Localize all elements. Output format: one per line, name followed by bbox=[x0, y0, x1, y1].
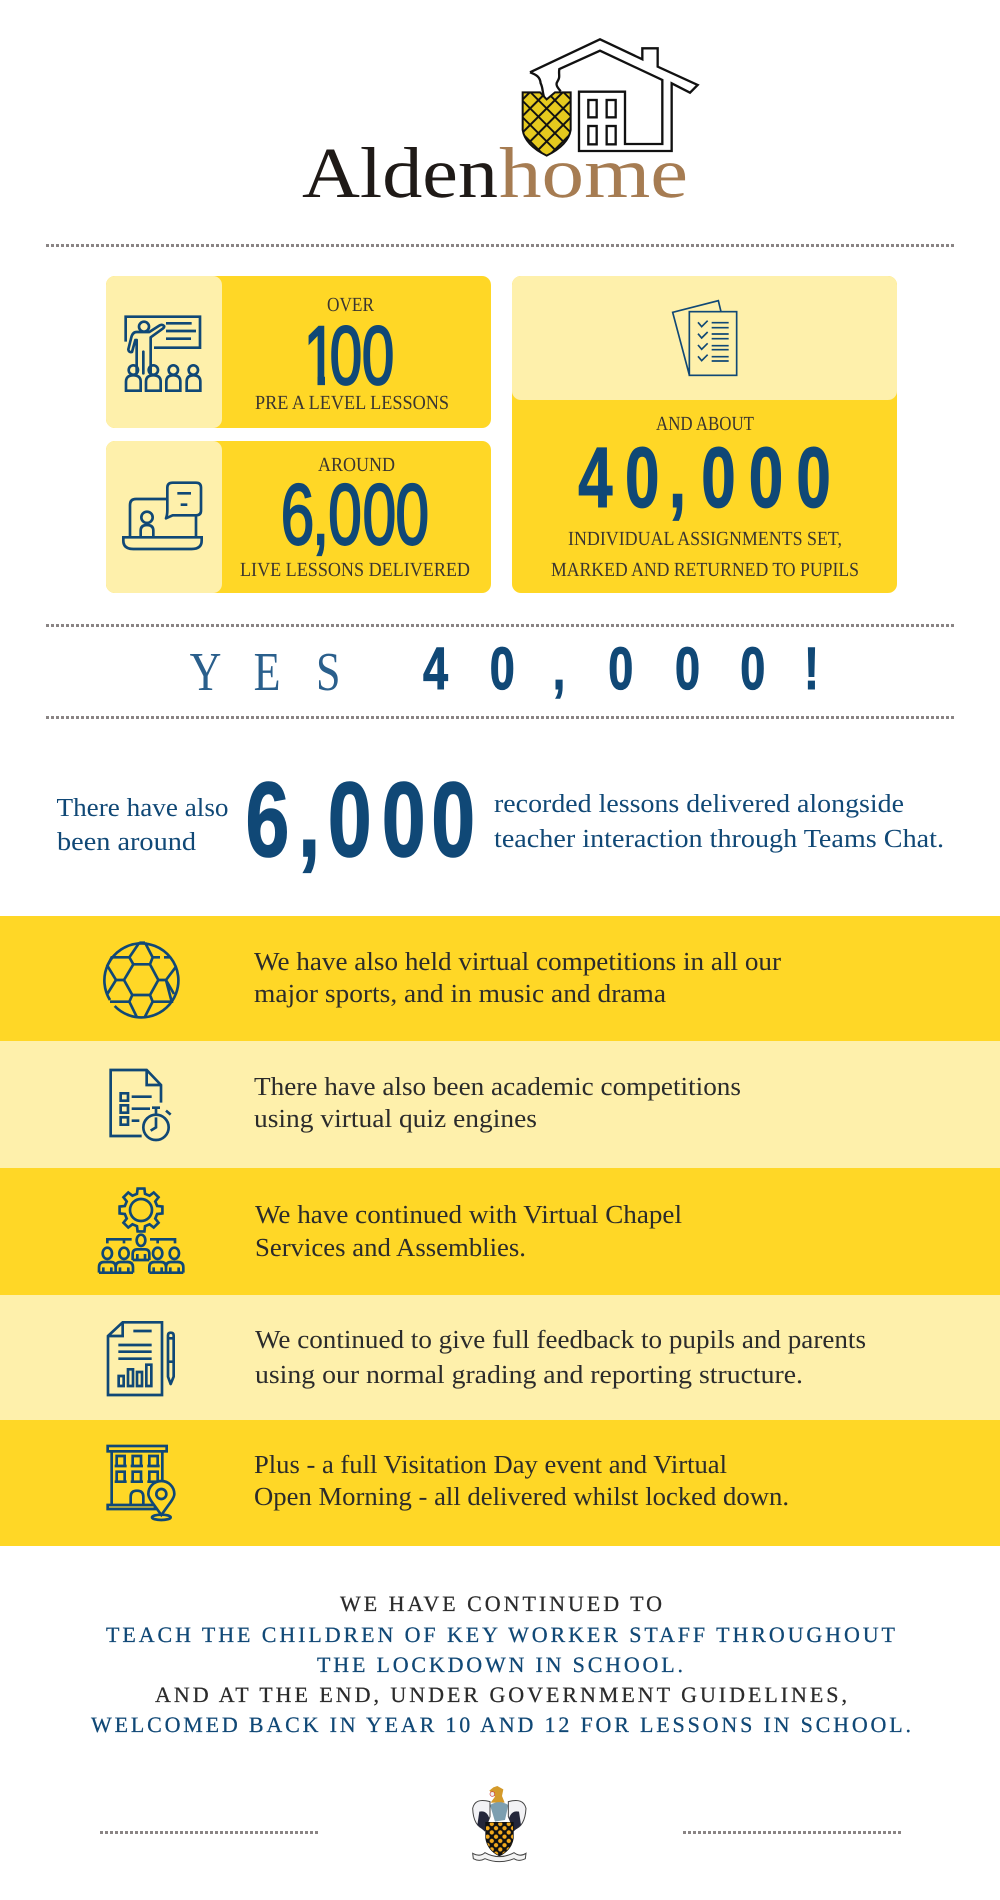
label: around: AROUND bbox=[318, 454, 395, 476]
icon: school crest bbox=[473, 1786, 526, 1862]
number: 100: 00 bbox=[330, 309, 394, 402]
logo icon: house bbox=[523, 39, 698, 156]
icon: checklist papers bbox=[673, 301, 737, 375]
closing statement: TEACH THE CHILDREN OF KEY WORKER STAFF THROUGHOUT bbox=[106, 1622, 896, 1647]
text: recorded lessons: teacher interaction through Teams Chat. bbox=[494, 824, 944, 853]
text: feedback and reporting: We continued to give full feedback to pupils and parents bbox=[255, 1325, 866, 1354]
text: visitation day and open morning: Open Morning - all delivered whilst locked down. bbox=[254, 1482, 789, 1511]
icon: online lesson on laptop bbox=[123, 483, 202, 549]
closing statement: THE LOCKDOWN IN SCHOOL. bbox=[317, 1652, 683, 1677]
text: recorded lessons: recorded lessons delivered alongside bbox=[494, 789, 904, 818]
text: chapel and assemblies bbox=[255, 1200, 682, 1262]
text: there have also been around: been around bbox=[57, 827, 196, 856]
closing statement: AND AT THE END, UNDER GOVERNMENT GUIDELINES, bbox=[155, 1682, 847, 1707]
text: there have also been around bbox=[56, 793, 228, 856]
panel: over 100 pre A level lessons bbox=[106, 276, 491, 428]
band: chapel and assemblies bbox=[0, 1168, 1000, 1295]
label: over: OVER bbox=[327, 294, 375, 316]
text: visitation day and open morning bbox=[254, 1450, 789, 1511]
label: marked and returned to pupils: MARKED AND RETURNED TO PUPILS bbox=[551, 559, 859, 581]
number: 100 bbox=[302, 309, 394, 402]
icon: school building with map pin bbox=[108, 1446, 174, 1520]
closing statement: WE HAVE CONTINUED TO bbox=[340, 1591, 662, 1616]
text: academic competitions: There have also been academic competitions bbox=[254, 1072, 741, 1101]
logo wordmark: home: home bbox=[499, 133, 688, 213]
band: feedback and reporting bbox=[0, 1295, 1000, 1420]
panel: about 40,000 assignments bbox=[512, 276, 897, 593]
heading number: 40,000!: 40,000! bbox=[423, 635, 819, 702]
heading: yes 40,000! bbox=[190, 635, 819, 702]
label: individual assignments set: INDIVIDUAL ASSIGNMENTS SET, bbox=[568, 528, 842, 550]
label: pre A level lessons: PRE A LEVEL LESSONS bbox=[255, 392, 449, 414]
icon: teacher at board with pupils bbox=[126, 317, 200, 391]
text: academic competitions bbox=[254, 1072, 741, 1133]
closing statement: WELCOMED BACK IN YEAR 10 AND 12 FOR LESSONS IN SCHOOL. bbox=[91, 1712, 911, 1737]
icon: report and pen bbox=[108, 1322, 174, 1395]
icon: quiz sheet and stopwatch bbox=[111, 1070, 171, 1140]
number: 40,000: 40,000 bbox=[578, 430, 831, 526]
label: and about: AND ABOUT bbox=[656, 413, 754, 435]
band: academic competitions bbox=[0, 1041, 1000, 1168]
number: 100: 1 bbox=[304, 309, 336, 402]
text: virtual competitions: major sports, and in music and drama bbox=[254, 979, 666, 1008]
text: feedback and reporting: using our normal grading and reporting structure. bbox=[255, 1360, 803, 1389]
text: virtual competitions bbox=[254, 947, 781, 1008]
heading word: yes: YES bbox=[190, 641, 340, 702]
closing statement bbox=[91, 1591, 911, 1737]
text: visitation day and open morning: Plus - a full Visitation Day event and Virtual bbox=[254, 1450, 727, 1479]
label: live lessons delivered: LIVE LESSONS DELIVERED bbox=[240, 559, 470, 581]
text: chapel and assemblies: Services and Assemblies. bbox=[255, 1233, 526, 1262]
text: feedback and reporting bbox=[255, 1325, 866, 1389]
text: virtual competitions: We have also held virtual competitions in all our bbox=[254, 947, 781, 976]
text: recorded lessons bbox=[494, 789, 944, 853]
number: 6,000: 6,000 bbox=[281, 467, 429, 563]
panel: around 6,000 live lessons delivered bbox=[106, 441, 491, 593]
logo: Aldenhome bbox=[302, 39, 698, 213]
band: visitation day and open morning bbox=[0, 1420, 1000, 1546]
icon: gear and people bbox=[99, 1189, 183, 1273]
band: virtual competitions bbox=[0, 916, 1000, 1041]
text: there have also been around: There have also bbox=[56, 793, 228, 822]
text: academic competitions: using virtual quiz engines bbox=[254, 1104, 537, 1133]
text: chapel and assemblies: We have continued with Virtual Chapel bbox=[255, 1200, 682, 1229]
icon: football bbox=[104, 943, 178, 1017]
callout: 6,000 recorded lessons bbox=[56, 761, 944, 879]
number: big 6,000: 6,000 bbox=[246, 761, 475, 879]
logo wordmark: Alden: Alden bbox=[302, 133, 498, 213]
